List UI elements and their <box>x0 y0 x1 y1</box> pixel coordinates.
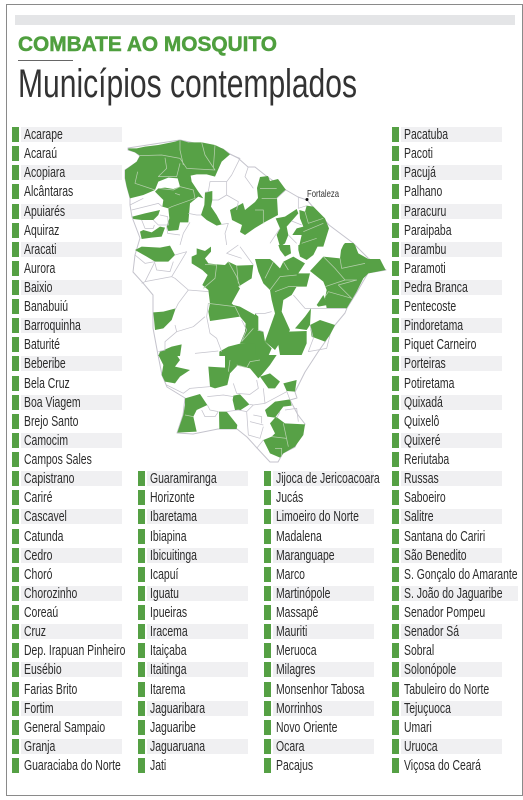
item: Piquet Carneiro <box>392 337 502 352</box>
item: Itaiçaba <box>138 643 248 658</box>
item: Ibaretama: Ibaretama <box>150 508 197 525</box>
item: S. João do Jaguaribe: S. João do Jaguaribe <box>404 585 503 602</box>
item: Solonópole: Solonópole <box>404 661 456 678</box>
region: west small 3 <box>135 246 175 262</box>
item: Itaitinga: Itaitinga <box>150 661 187 678</box>
item: Jucás <box>264 490 374 505</box>
item: Pacatuba <box>392 127 502 142</box>
item: Viçosa do Ceará: Viçosa do Ceará <box>404 757 481 774</box>
region: Choró <box>298 245 318 260</box>
item: General Sampaio: General Sampaio <box>24 719 105 736</box>
item: Jaguaribara: Jaguaribara <box>150 700 205 717</box>
list column 1 <box>12 126 125 774</box>
list column 4 <box>392 0 519 800</box>
item: Paramoti <box>392 261 502 276</box>
item: Porteiras <box>392 356 502 371</box>
region: south east <box>263 417 305 458</box>
item: Cruz <box>12 623 122 640</box>
item: Camocim: Camocim <box>24 432 68 449</box>
item: Solonópole <box>392 662 502 677</box>
item: Porteiras: Porteiras <box>404 355 446 372</box>
item: Quixeré: Quixeré <box>404 432 441 449</box>
item: Ibiapina: Ibiapina <box>150 528 187 544</box>
item: Monsenhor Tabosa: Monsenhor Tabosa <box>276 680 364 698</box>
list column 3 <box>264 0 382 800</box>
item: Granja: Granja <box>24 738 55 755</box>
green municipalities, northwest <box>125 140 230 239</box>
item: Meruoca: Meruoca <box>276 642 317 659</box>
item: Paramoti: Paramoti <box>404 260 446 277</box>
short rule under heading <box>18 60 73 61</box>
item: Ipueiras <box>138 605 248 620</box>
green municipalities, north coast <box>276 206 329 247</box>
item: Santana do Cariri <box>392 528 502 544</box>
item: Mauriti: Mauriti <box>276 623 307 640</box>
item: Itaitinga <box>138 662 248 677</box>
item: Ibaretama <box>138 509 248 524</box>
item: Jati: Jati <box>150 757 166 774</box>
item: Cascavel <box>12 508 122 525</box>
region: centre east <box>255 257 310 350</box>
item: Madalena <box>264 528 374 544</box>
region: Araripe <box>177 394 207 433</box>
item: Pacujá: Pacujá <box>404 164 436 181</box>
item: Horizonte: Horizonte <box>150 489 195 506</box>
item: Aquiraz: Aquiraz <box>24 222 59 239</box>
green municipalities, centre west <box>135 246 256 356</box>
title: municípios contemplados: Municípios contemplados <box>18 62 357 106</box>
item: Jaguaribara <box>138 701 248 716</box>
Fortaleza marker <box>306 188 339 201</box>
Fortaleza marker: Fortaleza <box>307 188 339 200</box>
item: Marco <box>264 567 374 582</box>
item: Reriutaba <box>392 452 502 467</box>
item: Baturité: Baturité <box>24 336 60 353</box>
item: Pindoretama: Pindoretama <box>404 317 463 334</box>
item: S. Gonçalo do Amarante: S. Gonçalo do Amarante <box>404 566 518 583</box>
item: São Benedito: São Benedito <box>404 547 467 564</box>
item: Cedro: Cedro <box>24 547 52 564</box>
item: Ibiapina <box>138 528 248 544</box>
region: metropolitan <box>292 206 329 247</box>
item: Icapuí <box>138 567 248 582</box>
item: Potiretama: Potiretama <box>404 375 454 392</box>
region: west small 2 <box>140 227 165 239</box>
item: Cascavel: Cascavel <box>24 508 67 525</box>
item: Chorozinho: Chorozinho <box>24 585 77 602</box>
region: Santa Quitéria strip <box>201 191 222 226</box>
item: Iguatu <box>138 586 248 601</box>
item: Marco: Marco <box>276 566 305 583</box>
green municipalities, south <box>158 355 305 458</box>
item: Limoeiro do Norte: Limoeiro do Norte <box>276 508 359 525</box>
item: Pedra Branca: Pedra Branca <box>404 279 468 296</box>
item: Acarape <box>12 126 122 143</box>
item: Maranguape <box>264 548 374 563</box>
item: Ocara <box>264 739 374 754</box>
region: Parambu <box>158 355 190 383</box>
item: Banabuiú: Banabuiú <box>24 298 68 315</box>
item: Iracema: Iracema <box>150 623 188 640</box>
item: Massapê: Massapê <box>276 604 318 621</box>
region: small triangle <box>317 295 328 307</box>
region: Jaguaribe <box>278 331 307 355</box>
item: Saboeiro: Saboeiro <box>404 489 446 506</box>
region: Maciço <box>276 209 298 247</box>
item: Milagres: Milagres <box>276 661 315 678</box>
item: Quixelô <box>392 414 502 429</box>
item: Itaiçaba: Itaiçaba <box>150 642 187 659</box>
item: Cedro <box>12 547 122 564</box>
item: Iguatu: Iguatu <box>150 585 179 602</box>
region: centre <box>192 247 255 345</box>
region: Cedro <box>265 399 292 418</box>
item: Itarema <box>138 682 248 696</box>
item: Aracati: Aracati <box>24 241 56 258</box>
item: Acopiara <box>12 164 122 181</box>
item: Paracuru: Paracuru <box>404 202 446 220</box>
item: Novo Oriente <box>264 720 374 735</box>
item: Palhano: Palhano <box>404 183 442 200</box>
item: Salitre <box>392 509 502 524</box>
item: Pentecoste <box>392 299 502 314</box>
item: Paracuru <box>392 204 502 218</box>
item: Apuiarés <box>12 202 122 220</box>
top grey bar <box>15 15 515 25</box>
item: Uruoca: Uruoca <box>404 738 438 755</box>
item: Aracati <box>12 241 122 258</box>
item: Capistrano: Capistrano <box>24 470 74 487</box>
item: Barroquinha <box>12 317 122 334</box>
item: Pacajus <box>264 758 374 773</box>
item: Jucás: Jucás <box>276 489 303 506</box>
item: S. Gonçalo do Amarante <box>392 567 502 582</box>
item: Umari <box>392 720 502 735</box>
region: northwest and Ibiapaba <box>125 140 230 231</box>
item: Pacajus: Pacajus <box>276 757 313 774</box>
item: Piquet Carneiro: Piquet Carneiro <box>404 336 476 353</box>
item: Eusébio: Eusébio <box>24 661 62 678</box>
item: Salitre: Salitre <box>404 508 434 525</box>
item: Apuiarés: Apuiarés <box>24 202 65 220</box>
item: Baixio: Baixio <box>24 279 52 296</box>
item: Paraipaba: Paraipaba <box>404 222 452 239</box>
item: Umari: Umari <box>404 719 432 736</box>
item: Reriutaba: Reriutaba <box>404 451 449 468</box>
region: Potiretama <box>295 308 311 330</box>
item: Boa Viagem: Boa Viagem <box>24 394 81 411</box>
green municipalities, centre east <box>255 243 386 356</box>
item: Acaraú: Acaraú <box>24 145 57 162</box>
item: Fortim: Fortim <box>24 700 54 717</box>
item: Cruz: Cruz <box>24 623 46 640</box>
region: Maciço south <box>278 245 291 257</box>
item: Granja <box>12 738 122 755</box>
item: Pacatuba: Pacatuba <box>404 126 448 143</box>
item: Chorozinho <box>12 585 122 602</box>
item: Farias Brito: Farias Brito <box>24 680 77 698</box>
item: São Benedito <box>392 548 502 563</box>
item: Sobral <box>392 643 502 658</box>
item: Saboeiro <box>392 490 502 505</box>
region: Pereiro <box>283 380 297 392</box>
item: Dep. Irapuan Pinheiro: Dep. Irapuan Pinheiro <box>24 642 125 659</box>
item: Palhano <box>392 184 502 199</box>
item: Tejuçuoca: Tejuçuoca <box>404 700 451 717</box>
item: Pindoretama <box>392 318 502 333</box>
item: Sobral: Sobral <box>404 642 434 659</box>
item: Senador Sá: Senador Sá <box>404 623 459 640</box>
item: Quixadá: Quixadá <box>404 394 443 411</box>
region: north central <box>230 176 286 235</box>
item: Quixelô: Quixelô <box>404 413 439 430</box>
item: Guaraciaba do Norte: Guaraciaba do Norte <box>24 757 121 774</box>
item: Santana do Cariri: Santana do Cariri <box>404 528 485 544</box>
item: Quixadá <box>392 395 502 410</box>
item: Madalena: Madalena <box>276 528 322 544</box>
item: Senador Pompeu <box>392 605 502 620</box>
item: Coreaú: Coreaú <box>24 604 58 621</box>
item: Baixio <box>12 279 122 296</box>
item: Beberibe <box>12 355 122 372</box>
item: Eusébio <box>12 661 122 678</box>
item: Jaguaribe <box>138 720 248 735</box>
municipal borders <box>130 140 365 457</box>
item: Icapuí: Icapuí <box>150 566 178 583</box>
region: Santana do Cariri <box>219 412 237 429</box>
region: Parambu top <box>158 344 182 356</box>
region: centre lower band <box>219 344 256 356</box>
item: Iracema <box>138 624 248 639</box>
state outline <box>125 140 386 462</box>
region: Acopiara area <box>208 355 277 388</box>
item: Jijoca de Jericoacoara: Jijoca de Jericoacoara <box>276 470 380 487</box>
item: Ibicuitinga <box>138 548 248 563</box>
item: Senador Sá <box>392 624 502 639</box>
item: Senador Pompeu: Senador Pompeu <box>404 604 485 621</box>
item: Alcântaras: Alcântaras <box>24 183 73 200</box>
item: Milagres <box>264 662 374 677</box>
item: Tabuleiro do Norte: Tabuleiro do Norte <box>404 680 489 698</box>
item: Acopiara: Acopiara <box>24 164 65 181</box>
item: Novo Oriente: Novo Oriente <box>276 719 337 736</box>
item: Ipueiras: Ipueiras <box>150 604 187 621</box>
item: Itarema: Itarema <box>150 680 185 698</box>
item: Quixeré <box>392 433 502 448</box>
region: east coast <box>310 243 386 308</box>
item: Acarape: Acarape <box>24 126 63 143</box>
item: Pedra Branca <box>392 280 502 295</box>
item: Pacujá <box>392 165 502 180</box>
heading: combate ao mosquito: COMBATE AO MOSQUITO <box>18 33 277 56</box>
item: Martinópole: Martinópole <box>276 585 330 602</box>
item: Fortim <box>12 700 122 717</box>
item: Ocara: Ocara <box>276 738 304 755</box>
item: Russas <box>392 471 502 486</box>
item: Morrinhos <box>264 701 374 716</box>
item: Maranguape: Maranguape <box>276 547 335 564</box>
item: Uruoca <box>392 739 502 754</box>
item: Campos Sales: Campos Sales <box>24 451 92 468</box>
item: Paraipaba <box>392 223 502 238</box>
region: west small 1 <box>132 210 160 220</box>
item: Bela Cruz: Bela Cruz <box>24 375 70 392</box>
item: Jaguaruana <box>138 739 248 754</box>
item: Parambu: Parambu <box>404 241 446 258</box>
item: Guaramiranga <box>138 470 248 487</box>
item: Jati <box>138 758 248 773</box>
item: Brejo Santo: Brejo Santo <box>24 413 78 430</box>
item: Ibicuitinga: Ibicuitinga <box>150 547 197 564</box>
item: Potiretama <box>392 376 502 391</box>
item: Boa Viagem <box>12 394 122 411</box>
item: Camocim <box>12 432 122 449</box>
region: Solonópole <box>255 330 272 356</box>
item: Pacoti <box>392 146 502 161</box>
item: Beberibe: Beberibe <box>24 355 66 372</box>
item: Meruoca <box>264 643 374 658</box>
list column 2 <box>138 470 248 774</box>
item: Limoeiro do Norte <box>264 509 374 524</box>
region: Catarina <box>153 308 176 330</box>
item: Choró: Choró <box>24 566 52 583</box>
item: Catunda: Catunda <box>24 528 63 544</box>
item: Jaguaruana: Jaguaruana <box>150 738 205 755</box>
item: Jaguaribe: Jaguaribe <box>150 719 196 736</box>
item: Pacoti: Pacoti <box>404 145 433 162</box>
item: Pentecoste: Pentecoste <box>404 298 456 315</box>
item: Viçosa do Ceará <box>392 758 502 773</box>
region: Farias Brito <box>233 394 249 410</box>
region: Alto Santo <box>310 320 335 342</box>
item: Barroquinha: Barroquinha <box>24 317 81 334</box>
region: Icó <box>260 373 280 388</box>
item: Massapê <box>264 605 374 620</box>
item: Mauriti <box>264 624 374 639</box>
item: Aurora: Aurora <box>24 260 55 277</box>
item: Russas: Russas <box>404 470 439 487</box>
item: Cariré: Cariré <box>24 489 52 506</box>
item: Tejuçuoca <box>392 701 502 716</box>
item: Guaramiranga: Guaramiranga <box>150 470 217 487</box>
region: small west <box>255 313 258 332</box>
item: Martinópole <box>264 586 374 601</box>
item: Parambu <box>392 242 502 257</box>
item: Morrinhos: Morrinhos <box>276 700 322 717</box>
item: Capistrano <box>12 470 122 487</box>
